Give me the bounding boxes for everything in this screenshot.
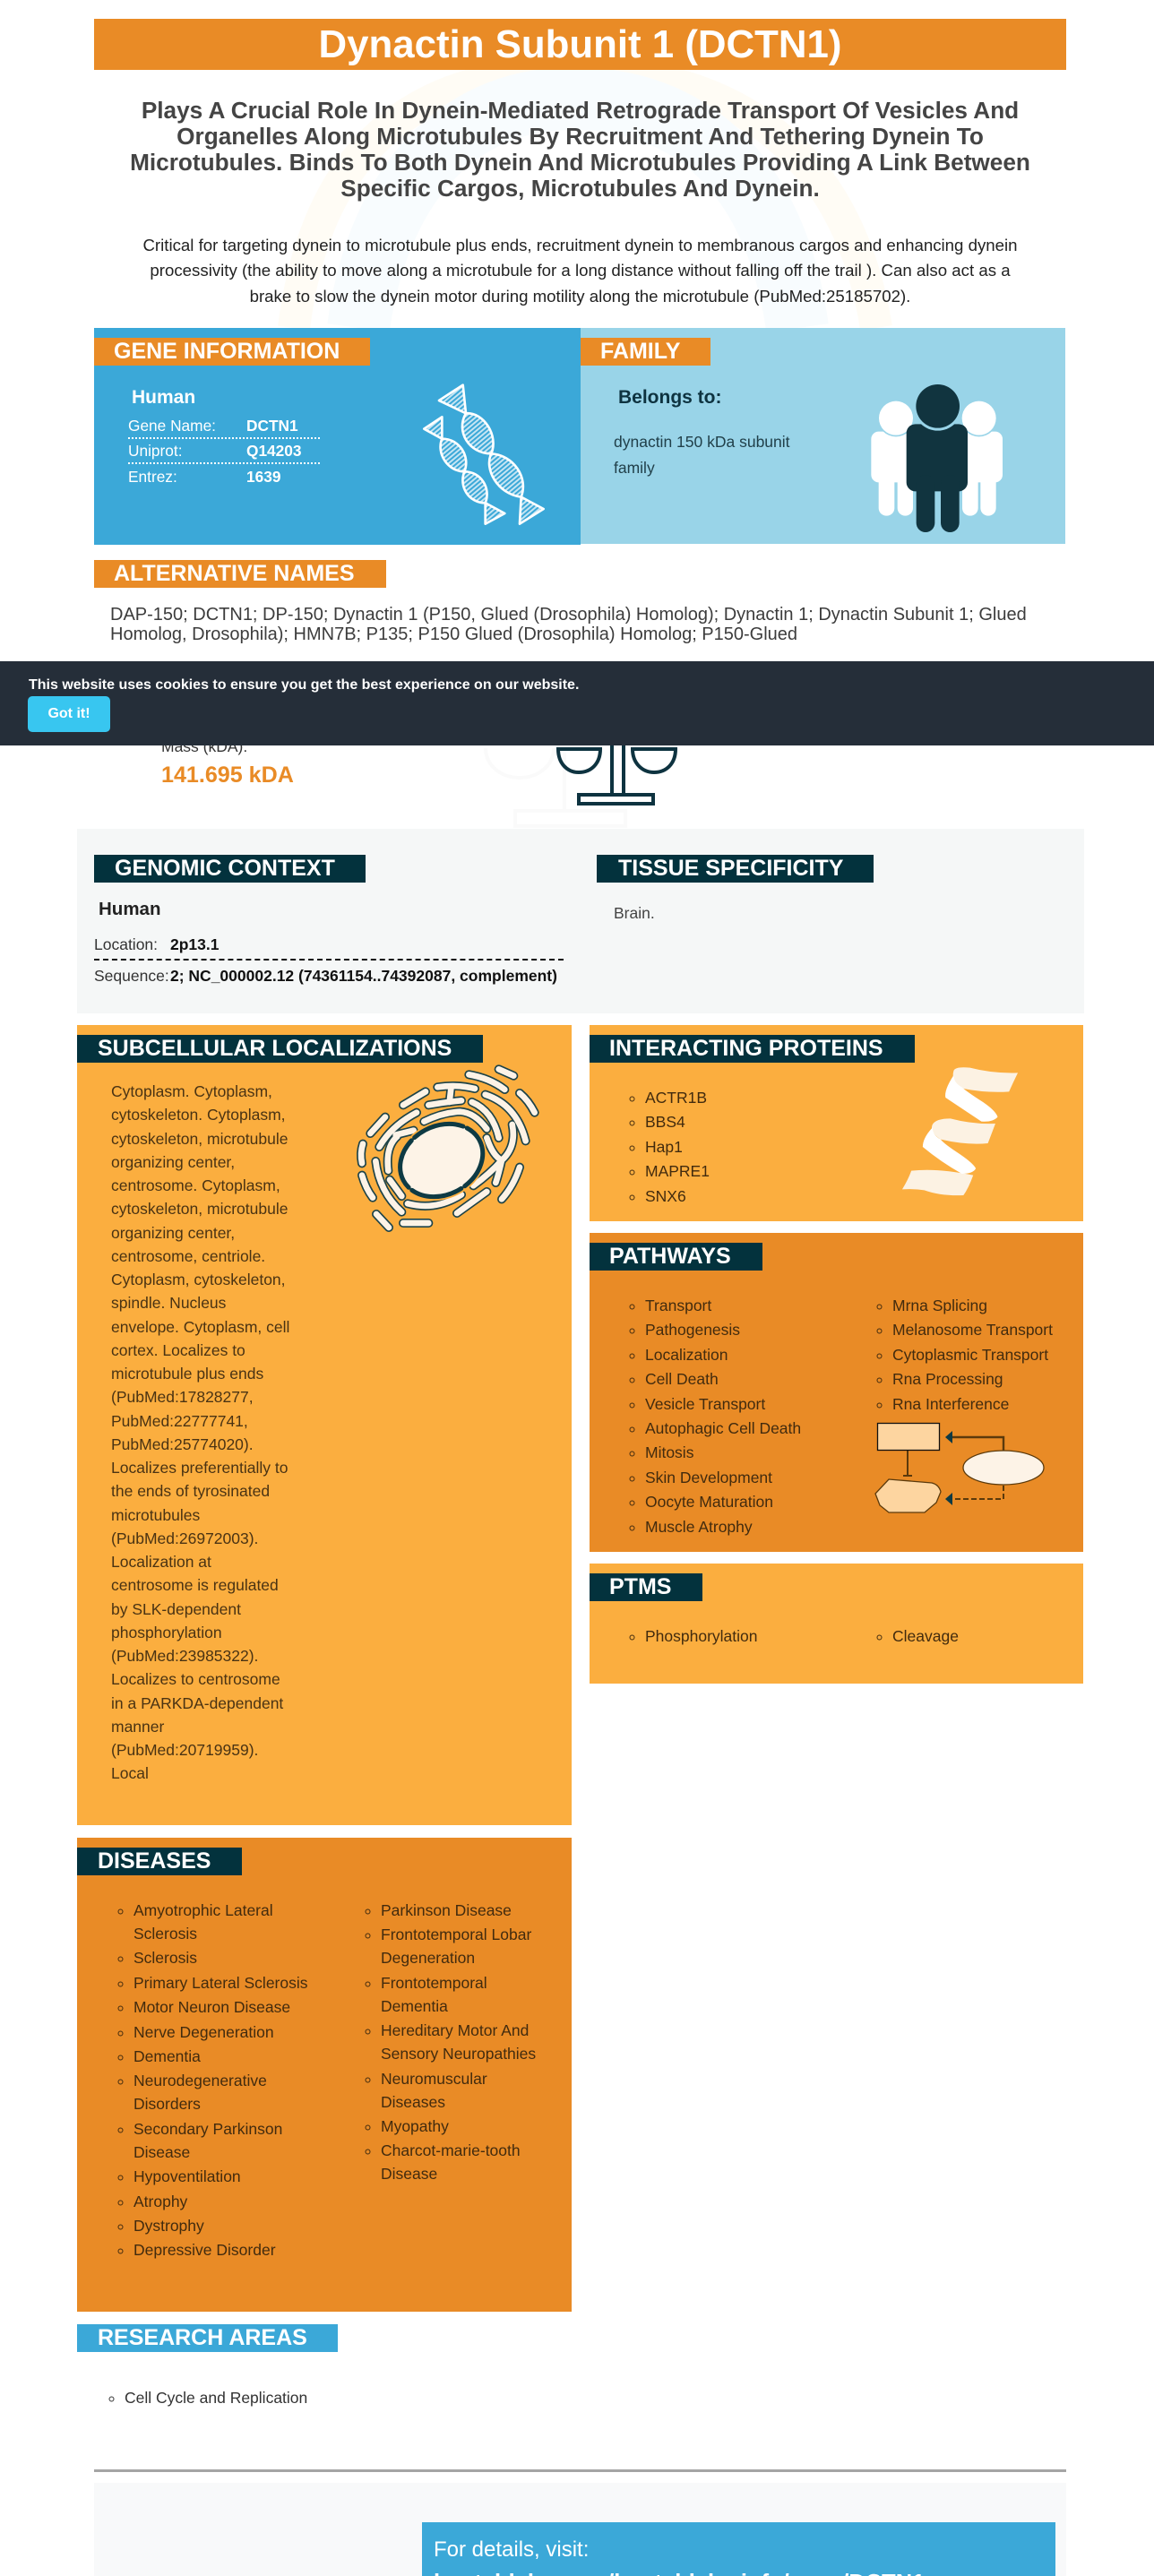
disease list column 1	[118, 1901, 308, 2259]
details label: For details, visit:	[434, 2537, 589, 2562]
localization text	[111, 1082, 289, 1782]
disease list column 1: Depressive Disorder	[133, 2241, 276, 2259]
button: got it	[28, 696, 110, 732]
cookie banner	[0, 661, 1154, 745]
disease list column 2: Disease	[381, 2165, 437, 2183]
panel: genomic context and tissue specificity: 2; NC_000002.12 (74361154..74392087, complement)	[170, 967, 557, 985]
heading: diseases: DISEASES	[98, 1848, 211, 1874]
localization text: cytoskeleton, microtubule	[111, 1129, 288, 1147]
heading: family: FAMILY	[600, 339, 680, 364]
heading: interacting proteins: INTERACTING PROTEINS	[609, 1036, 883, 1061]
protein list: ACTR1B	[645, 1089, 707, 1107]
pathway list column 2: Mrna Splicing	[892, 1297, 987, 1314]
protein list: MAPRE1	[645, 1162, 710, 1180]
disease list column 1: Hypoventilation	[133, 2167, 241, 2185]
icon: protein ribbon	[902, 1067, 1018, 1195]
localization text: cytoskeleton. Cytoplasm,	[111, 1106, 286, 1124]
row: gene name	[128, 414, 320, 439]
panel: gene information	[94, 328, 581, 545]
heading: tissue specificity: TISSUE SPECIFICITY	[618, 856, 843, 881]
heading: subcellular localizations: SUBCELLULAR LOCALIZATIONS	[98, 1036, 452, 1061]
icon: cell with endoplasmic reticulum	[357, 1064, 539, 1232]
gene facts table	[128, 417, 320, 486]
localization text: centrosome is regulated	[111, 1576, 279, 1594]
heading: pathways: PATHWAYS	[609, 1244, 731, 1269]
pathway list column 1: Muscle Atrophy	[645, 1518, 753, 1536]
pathway list column 1: Autophagic Cell Death	[645, 1419, 801, 1437]
cookie message: This website uses cookies to ensure you get the best experience on our website.	[29, 677, 579, 693]
disease list column 1: Sclerosis	[133, 1925, 197, 1943]
pathway list column 2: Rna Interference	[892, 1395, 1009, 1413]
disease list column 2	[366, 1901, 536, 2183]
panel: PTMs	[590, 1564, 1083, 1684]
localization text: phosphorylation	[111, 1624, 222, 1641]
panel: family	[581, 328, 1065, 544]
disease list column 1: Neurodegenerative	[133, 2072, 267, 2089]
protein list: BBS4	[645, 1113, 685, 1131]
protein list: Hap1	[645, 1138, 683, 1156]
localization text: organizing center,	[111, 1153, 235, 1171]
sequence row	[94, 967, 557, 985]
alternative names text: Homolog, Drosophila); HMN7B; P135; P150 Glued (Drosophila) Homolog; P150-Glued	[110, 625, 797, 644]
subtitle: Organelles Along Microtubules By Recruitment And Tethering Dynein To	[177, 123, 984, 150]
panel: pathways	[590, 1233, 1083, 1552]
disease list column 2: Myopathy	[381, 2117, 449, 2135]
alternative names text	[110, 605, 1027, 644]
localization text: PubMed:25774020).	[111, 1435, 254, 1453]
alternative names text: DAP-150; DCTN1; DP-150; Dynactin 1 (P150, Glued (Drosophila) Homolog); Dynactin 1; Dynactin Subunit 1; Glued	[110, 605, 1027, 625]
localization text: PubMed:22777741,	[111, 1412, 248, 1430]
disease list column 1: Disease	[133, 2143, 190, 2161]
localization text: Localizes preferentially to	[111, 1459, 288, 1477]
localization text: in a PARKDA-dependent	[111, 1693, 283, 1711]
localization text: manner	[111, 1718, 164, 1736]
heading: PTMs: PTMS	[609, 1574, 671, 1599]
location row	[94, 933, 564, 961]
row: gene name: Gene Name:	[128, 417, 216, 435]
row: uniprot: Uniprot:	[128, 442, 183, 460]
button: got it: Got it!	[47, 706, 90, 721]
panel: genomic context and tissue specificity	[77, 829, 1084, 1013]
mass value: 141.695 kDA	[161, 762, 294, 788]
family description: dynactin 150 kDa subunit	[614, 433, 790, 451]
description paragraph	[142, 236, 1018, 306]
PTM list column 2: Cleavage	[892, 1627, 959, 1645]
belongs to label: Belongs to:	[618, 387, 722, 408]
heading: gene information: GENE INFORMATION	[114, 339, 340, 364]
heading: PTMs	[590, 1573, 702, 1601]
localization text: (PubMed:17828277,	[111, 1388, 254, 1406]
subtitle: Microtubules. Binds To Both Dynein And Microtubules Providing A Link Between	[130, 149, 1030, 176]
disease list column 1: Motor Neuron Disease	[133, 1998, 290, 2016]
protein list	[629, 1089, 710, 1205]
pathway list column 1: Mitosis	[645, 1443, 693, 1461]
pathway list column 1: Skin Development	[645, 1469, 772, 1486]
disease list column 2: Hereditary Motor And	[381, 2021, 529, 2039]
research areas list: Cell Cycle and Replication	[125, 2389, 307, 2407]
localization text: Localization at	[111, 1553, 211, 1571]
description paragraph: brake to slow the dynein motor during motility along the microtubule (PubMed:25185702).	[250, 287, 910, 306]
icon: DNA helices	[423, 383, 545, 525]
tissue text: Brain.	[614, 904, 655, 922]
pathway list column 1: Localization	[645, 1346, 728, 1364]
localization text: the ends of tyrosinated	[111, 1482, 270, 1500]
family description: family	[614, 459, 655, 477]
callout: details link	[422, 2522, 1055, 2576]
disease list column 2: Frontotemporal	[381, 1974, 487, 1992]
disease list column 2: Frontotemporal Lobar	[381, 1926, 531, 1943]
icon: pathway diagram	[874, 1423, 1045, 1513]
disease list column 1: Primary Lateral Sclerosis	[133, 1974, 308, 1992]
disease list column 2: Diseases	[381, 2093, 445, 2111]
pathway list column 2	[876, 1297, 1053, 1413]
localization text: by SLK-dependent	[111, 1600, 241, 1618]
heading: alternative names: ALTERNATIVE NAMES	[114, 561, 355, 586]
disease list column 2: Dementia	[381, 1997, 448, 2015]
location row: 2p13.1	[170, 935, 219, 953]
disease list column 1: Nerve Degeneration	[133, 2023, 274, 2041]
pathway list column 1	[629, 1297, 801, 1536]
localization text: cytoskeleton, microtubule	[111, 1200, 288, 1218]
pathway list column 2: Rna Processing	[892, 1370, 1003, 1388]
localization text: centrosome, centriole.	[111, 1247, 265, 1265]
panel: footer	[94, 2483, 1066, 2576]
heading: research areas: RESEARCH AREAS	[98, 2325, 307, 2350]
localization text: cortex. Localizes to	[111, 1341, 245, 1359]
disease list column 1: Atrophy	[133, 2193, 187, 2210]
pathway list column 2: Cytoplasmic Transport	[892, 1346, 1048, 1364]
mass label: Mass (kDA):	[161, 737, 247, 755]
icon: balance scale	[556, 745, 677, 806]
disease list column 1: Amyotrophic Lateral	[133, 1901, 273, 1919]
panel: interacting proteins	[590, 1025, 1083, 1221]
species label: Human	[99, 899, 160, 919]
heading: diseases	[77, 1848, 242, 1875]
PTM list column 1: Phosphorylation	[645, 1627, 758, 1645]
row: entrez: 1639	[246, 468, 280, 486]
localization text: (PubMed:23985322).	[111, 1647, 258, 1665]
localization text: spindle. Nucleus	[111, 1294, 226, 1312]
background watermark	[278, 70, 892, 328]
localization text: (PubMed:20719959).	[111, 1741, 258, 1759]
localization text: centrosome. Cytoplasm,	[111, 1176, 280, 1194]
disease list column 1: Dystrophy	[133, 2217, 204, 2235]
panel: subcellular localizations	[77, 1025, 572, 1825]
row: gene name: DCTN1	[246, 417, 298, 435]
location row: Location:	[94, 935, 158, 953]
localization text: Cytoplasm, cytoskeleton,	[111, 1271, 286, 1288]
disease list column 1: Disorders	[133, 2095, 201, 2113]
localization text: (PubMed:26972003).	[111, 1529, 258, 1547]
localization text: envelope. Cytoplasm, cell	[111, 1317, 289, 1335]
protein list: SNX6	[645, 1187, 686, 1205]
subtitle: Specific Cargos, Microtubules And Dynein.	[340, 175, 820, 202]
row: uniprot: Q14203	[246, 442, 301, 460]
panel: diseases	[77, 1838, 572, 2312]
pathway list column 1: Oocyte Maturation	[645, 1493, 773, 1511]
disease list column 2: Degeneration	[381, 1949, 475, 1967]
localization text: Localizes to centrosome	[111, 1670, 280, 1688]
disease list column 2: Neuromuscular	[381, 2070, 487, 2088]
localization text: Local	[111, 1764, 149, 1782]
description paragraph: processivity (the ability to move along a microtubule for a long distance without falling off the trail ). Can also act as a	[150, 261, 1011, 280]
heading: genomic context: GENOMIC CONTEXT	[115, 856, 335, 881]
icon: group of people	[871, 384, 1003, 532]
subtitle: Plays A Crucial Role In Dynein-Mediated Retrograde Transport Of Vesicles And	[142, 97, 1019, 124]
row: entrez: Entrez:	[128, 468, 177, 486]
sequence row: Sequence:	[94, 967, 169, 985]
row: uniprot	[128, 439, 320, 464]
species label: Human	[132, 387, 195, 408]
disease list column 1: Dementia	[133, 2047, 201, 2065]
pathway list column 1: Pathogenesis	[645, 1321, 740, 1339]
heading: family	[581, 338, 710, 366]
pathway list column 1: Transport	[645, 1297, 711, 1314]
row: entrez	[128, 468, 280, 486]
localization text: microtubules	[111, 1505, 200, 1523]
pathway list column 1: Vesicle Transport	[645, 1395, 765, 1413]
title bar	[94, 19, 1066, 70]
disease list column 2: Parkinson Disease	[381, 1901, 512, 1919]
heading: pathways	[590, 1243, 762, 1271]
disease list column 1: Sclerosis	[133, 1949, 197, 1967]
family description	[614, 433, 790, 477]
subtitle	[130, 97, 1030, 202]
title bar: Dynactin Subunit 1 (DCTN1)	[319, 22, 841, 66]
description paragraph: Critical for targeting dynein to microtubule plus ends, recruitment dynein to membranous cargos and enhancing dynein	[142, 236, 1018, 254]
disease list column 2: Sensory Neuropathies	[381, 2045, 536, 2063]
pathway list column 2: Melanosome Transport	[892, 1321, 1053, 1339]
pathway list column 1: Cell Death	[645, 1370, 719, 1388]
footer divider	[94, 2469, 1066, 2472]
localization text: microtubule plus ends	[111, 1365, 263, 1383]
localization text: Cytoplasm. Cytoplasm,	[111, 1082, 272, 1100]
disease list column 2: Charcot-marie-tooth	[381, 2141, 521, 2159]
localization text: organizing center,	[111, 1224, 235, 1242]
disease list column 1: Secondary Parkinson	[133, 2120, 282, 2138]
